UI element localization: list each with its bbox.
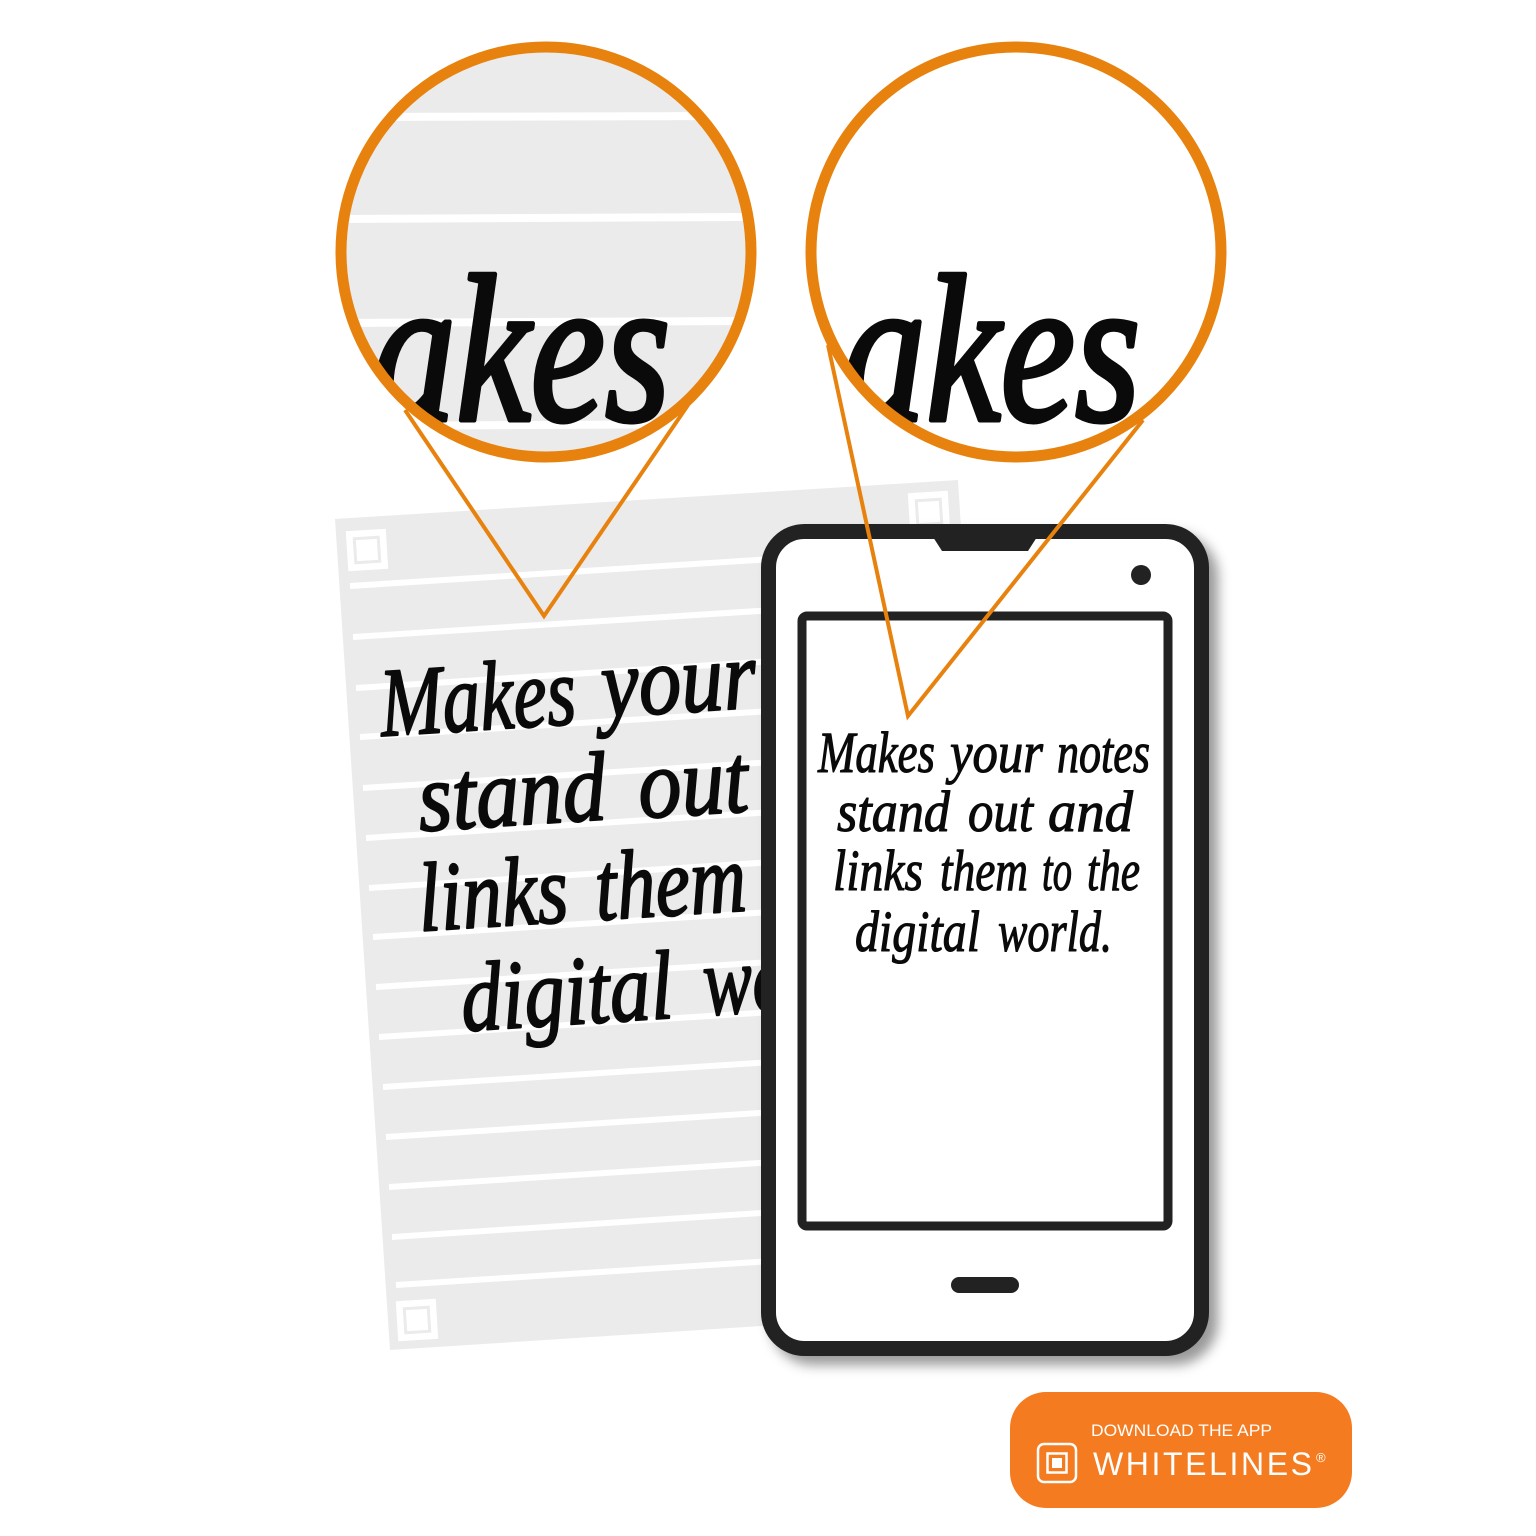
handwriting on phone: out xyxy=(968,779,1035,844)
handwriting on paper: to xyxy=(767,819,823,930)
callout: right pointer lines xyxy=(828,345,1143,716)
handwriting on phone: Makes xyxy=(817,720,935,785)
handwriting on phone: the xyxy=(1087,838,1140,903)
phone home button xyxy=(951,1277,1019,1293)
callout: right magnifier on phone xyxy=(811,47,1221,466)
handwriting on paper xyxy=(375,609,938,1053)
phone notch xyxy=(933,537,1037,551)
handwriting on paper: Makes xyxy=(375,638,579,758)
panel: paper notebook page xyxy=(335,480,1010,1350)
handwriting on phone: them xyxy=(940,838,1028,903)
handwriting on phone: stand xyxy=(837,779,951,844)
handwriting on paper: digital xyxy=(458,932,676,1053)
icon: whitelines logo xyxy=(1038,1444,1076,1482)
handwriting on phone: and xyxy=(1048,779,1134,844)
button small label: DOWNLOAD THE APP xyxy=(1091,1421,1272,1440)
handwriting on paper: and xyxy=(770,713,918,830)
handwriting on paper: them xyxy=(592,825,749,942)
handwriting on paper: your xyxy=(590,621,760,739)
callout: left magnifier on paper xyxy=(340,47,751,466)
illustration: smartphone xyxy=(768,532,1202,1348)
callout: left pointer lines xyxy=(405,405,688,616)
icon: page marker top right xyxy=(911,494,947,530)
handwriting on phone: your xyxy=(946,720,1043,785)
handwriting on phone xyxy=(817,720,1150,964)
handwriting on paper: world. xyxy=(700,917,896,1037)
registered mark: ® xyxy=(1316,1450,1326,1465)
phone screen xyxy=(802,616,1168,1226)
brand name: WHITELINES xyxy=(1093,1446,1312,1482)
handwriting on phone: world. xyxy=(998,899,1112,964)
phone camera xyxy=(1131,565,1151,585)
handwriting on paper: the xyxy=(841,812,935,925)
handwriting on paper: links xyxy=(415,836,571,953)
callout: right magnifier on phone: akes xyxy=(842,234,1141,466)
callout: left magnifier on paper: akes xyxy=(372,234,671,466)
icon: page marker bottom left xyxy=(399,1302,435,1338)
handwriting on phone: links xyxy=(833,838,923,903)
handwriting on phone: to xyxy=(1042,838,1072,903)
handwriting on paper: out xyxy=(635,725,754,840)
handwriting on phone: digital xyxy=(855,899,980,964)
handwriting on paper: notes xyxy=(776,609,938,727)
button: download the app xyxy=(1010,1392,1352,1508)
handwriting on phone: notes xyxy=(1057,720,1150,785)
handwriting on paper: stand xyxy=(415,733,610,853)
icon: page marker top left xyxy=(349,532,385,568)
